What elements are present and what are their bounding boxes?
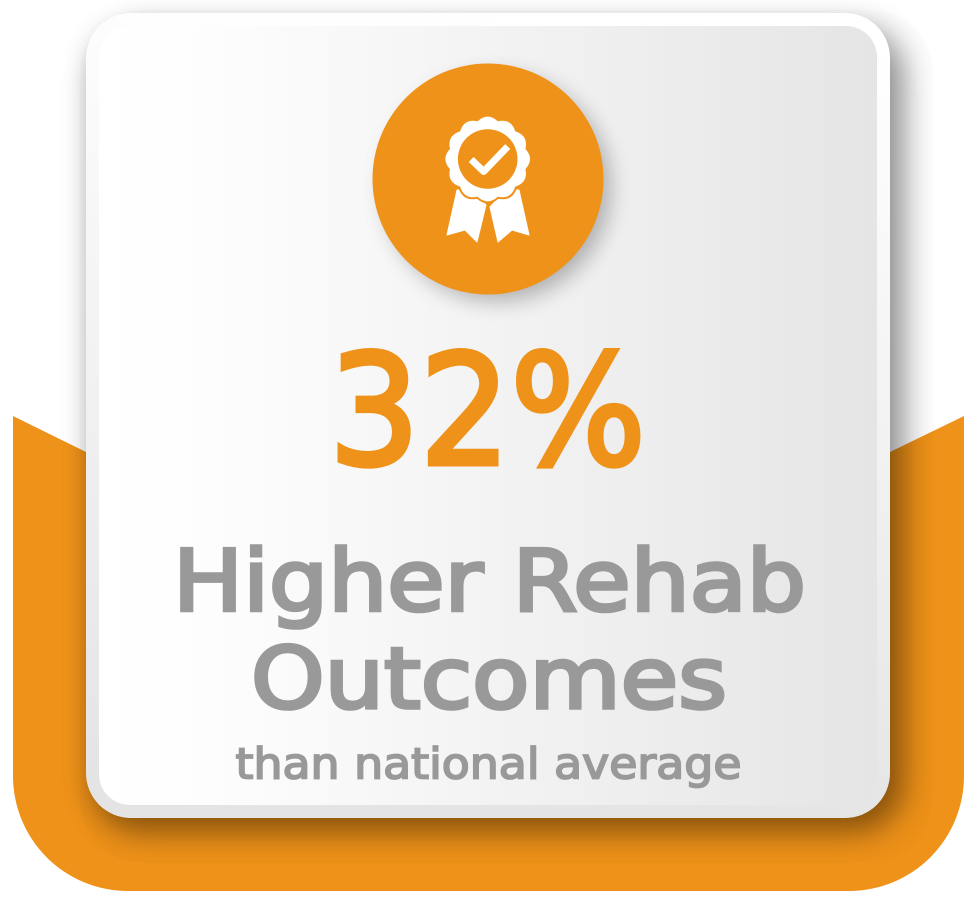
orange circle [372,64,604,294]
panel: card [86,13,890,818]
circle shadow [384,75,610,301]
subheading: than national average [236,740,742,790]
icon: award ribbon in orange circle [372,64,604,294]
orange backing shape [13,416,964,891]
ribbon tails [447,190,529,242]
heading: Higher Rehab Outcomes [173,532,806,729]
heading line 1: Higher Rehab [173,532,806,632]
card shadow [92,26,904,832]
statistic: 32%: 32% [329,323,646,501]
card outer frame [86,13,890,818]
rosette [445,117,530,201]
card inner face [99,26,877,805]
heading line 2: Outcomes [251,630,727,729]
